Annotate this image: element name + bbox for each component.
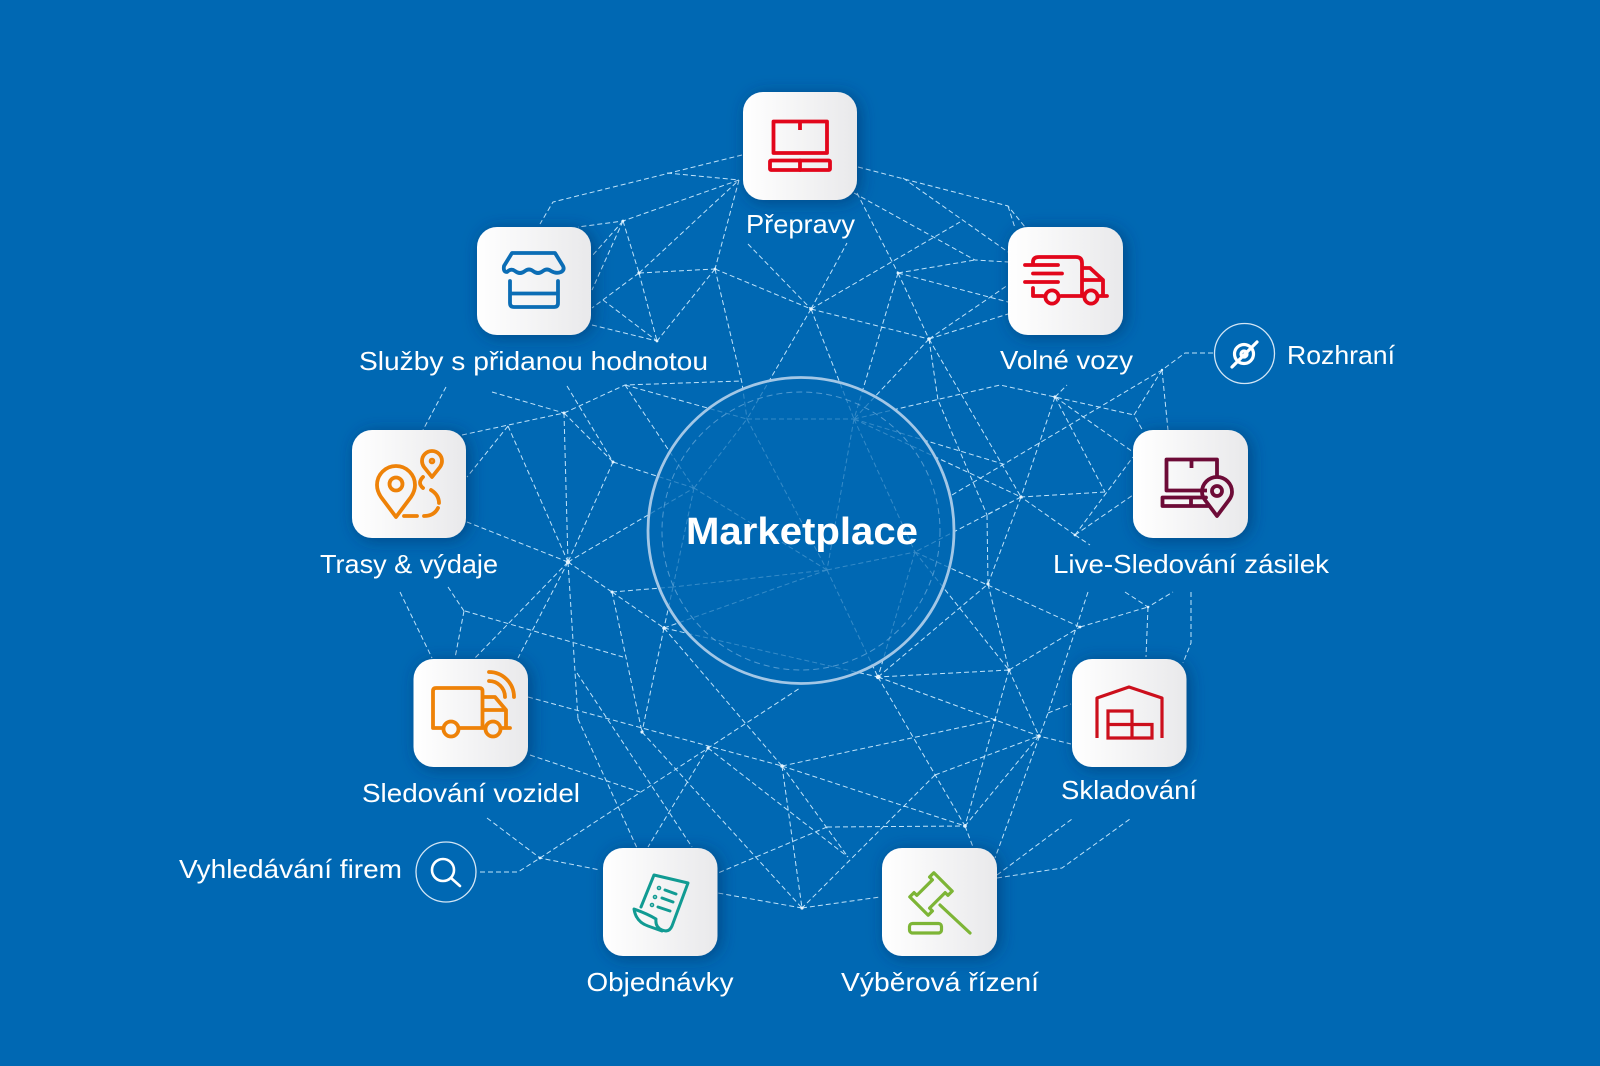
label: Objednávky — [586, 967, 734, 997]
card: Live-Sledování zásilek — [1053, 430, 1330, 579]
icon: truck with signal — [433, 672, 514, 736]
label: Vyhledávání firem — [179, 854, 402, 884]
icon: laptop with location pin — [1162, 460, 1232, 516]
icon: laptop with parcel — [770, 122, 830, 170]
network of dashed connection lines — [400, 155, 1214, 910]
label: Sledování vozidel — [362, 778, 580, 808]
icon: order document — [634, 875, 688, 931]
heading: Marketplace — [686, 511, 918, 553]
card: Trasy & výdaje — [320, 430, 498, 579]
card: Objednávky — [586, 848, 734, 997]
icon: market stall — [504, 253, 564, 307]
label: Trasy & výdaje — [320, 549, 498, 579]
icon: gavel — [910, 873, 970, 933]
badge: Rozhraní — [1214, 324, 1396, 384]
card: Výběrová řízení — [841, 848, 1040, 997]
card: Volné vozy — [1000, 227, 1133, 375]
label: Rozhraní — [1287, 340, 1396, 370]
central hub: Marketplace — [648, 378, 954, 684]
icon: interface target — [1232, 342, 1257, 367]
icon: magnifier — [432, 859, 460, 886]
label: Služby s přidanou hodnotou — [359, 346, 708, 376]
label: Výběrová řízení — [841, 967, 1040, 997]
label: Skladování — [1061, 775, 1198, 805]
label: Přepravy — [746, 209, 855, 239]
card: Skladování — [1061, 659, 1198, 805]
icon: fast delivery truck — [1025, 257, 1107, 304]
label: Volné vozy — [1000, 345, 1133, 375]
card: Služby s přidanou hodnotou — [359, 227, 708, 376]
badge: Vyhledávání firem — [179, 842, 476, 902]
icon: route pins — [377, 451, 442, 517]
label: Live-Sledování zásilek — [1053, 549, 1330, 579]
card: Sledování vozidel — [362, 659, 580, 808]
icon: warehouse — [1097, 687, 1162, 738]
card: Přepravy — [743, 92, 857, 239]
